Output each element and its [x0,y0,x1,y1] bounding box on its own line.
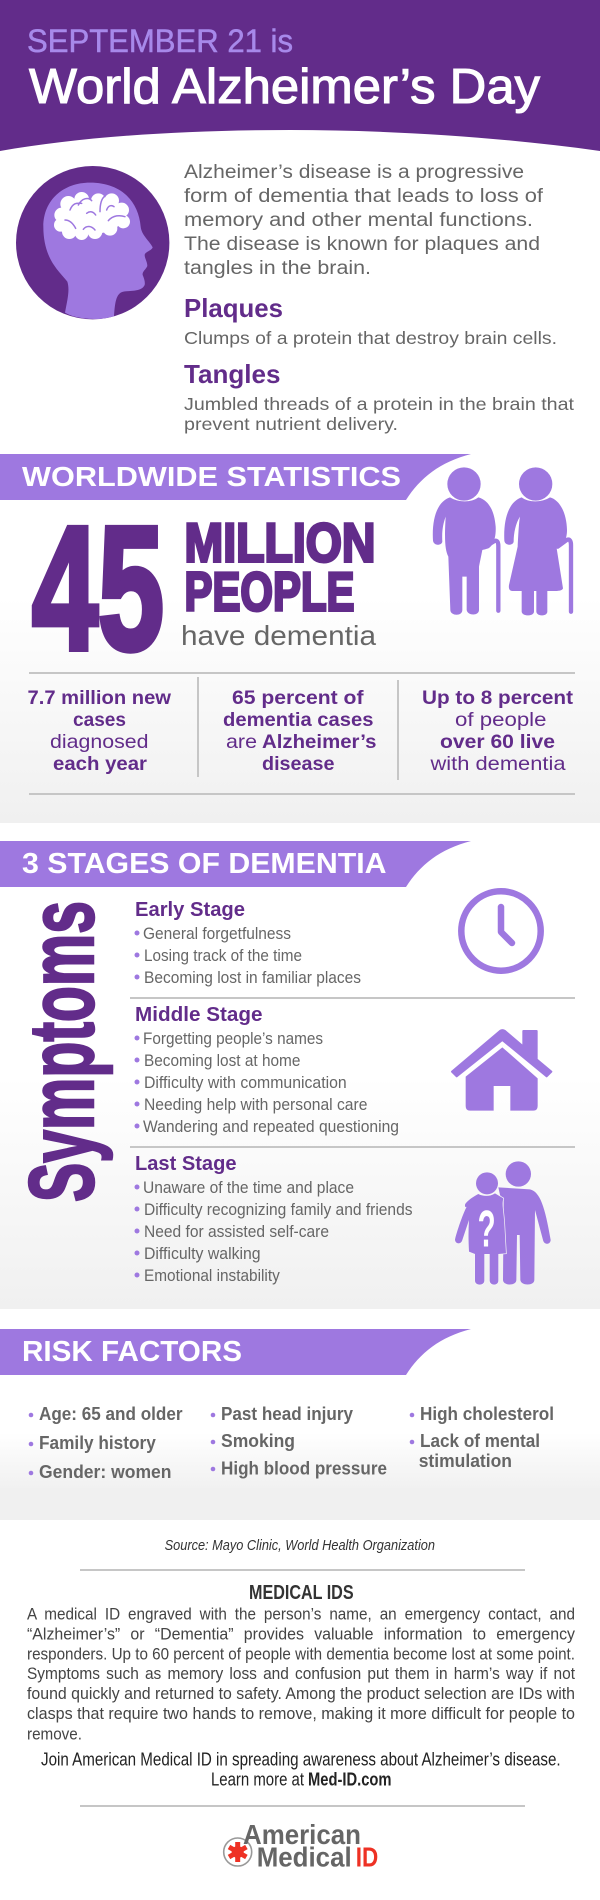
vertical title: symptoms: Symptoms [11,901,113,1202]
plaques definition: Plaques [184,293,283,323]
risk list: column 2: Past head injury [221,1404,353,1424]
risk list: column 1: Gender: women [39,1462,172,1482]
middle stage: Difficulty with communication [144,1073,347,1092]
stat: people over 60 [422,687,574,775]
heading banner: risk factors: RISK FACTORS [22,1336,242,1368]
stat: new cases [28,687,172,775]
stat: share of Alzheimer's: dementia cases [223,709,374,731]
call to action: Learn more at [211,1769,304,1789]
stat: share of Alzheimer's: 65 percent of [232,687,364,709]
middle stage: Wandering and repeated questioning [143,1117,399,1136]
logo: American Medical ID: ID [356,1842,378,1873]
early stage [134,898,361,987]
tangles definition: prevent nutrient delivery. [184,414,398,434]
early stage: General forgetfulness [143,924,291,943]
risk list: column 1: Family history [39,1433,156,1453]
middle stage [134,1003,399,1136]
stat: share of Alzheimer's [223,687,377,775]
last stage: Difficulty recognizing family and friends [144,1200,412,1219]
call to action: Med-ID.com [308,1769,392,1789]
medical IDs block [27,1582,576,1743]
risk list: column 2: High blood pressure [221,1458,387,1478]
title: World Alzheimer’s Day [29,60,541,114]
heading banner: risk factors [0,1329,471,1375]
medical IDs paragraph: “Alzheimer’s” or “Dementia” provides valuable information to emergency [27,1625,576,1643]
heading banner: worldwide statistics [0,454,471,500]
intro paragraph: tangles in the brain. [184,258,371,279]
intro paragraph: memory and other mental functions. [184,210,533,231]
call to action [41,1749,561,1789]
medical IDs paragraph: found quickly and returned to safety. Among the product selection are IDs with [27,1685,575,1703]
header banner [0,0,600,151]
million people [184,512,376,622]
middle stage: Forgetting people’s names [143,1029,323,1048]
plaques definition: Clumps of a protein that destroy brain cells. [184,328,557,348]
stat: people over 60: of people [455,709,546,731]
heading banner: stages: 3 STAGES OF DEMENTIA [22,848,387,880]
icon: clock [461,891,541,971]
stat: new cases: each year [53,753,147,775]
logo: American Medical ID [224,1819,378,1873]
stat: people over 60: with dementia [429,753,566,775]
tangles definition [184,359,574,434]
medical IDs paragraph: remove. [27,1725,82,1743]
plaques definition [184,293,557,348]
medical IDs heading: MEDICAL IDS [249,1582,354,1604]
risk list: column 2 [211,1404,387,1478]
heading banner: worldwide statistics: WORLDWIDE STATISTICS [22,461,401,492]
stat: people over 60: over 60 live [440,731,555,753]
icon: couple with question mark [455,1161,551,1285]
last stage: Emotional instability [144,1266,280,1285]
million people: MILLION [184,512,376,574]
last stage: Need for assisted self-care [144,1222,329,1241]
icon: head with brain [16,166,169,319]
source note: Source: Mayo Clinic, World Health Organization [165,1537,435,1554]
early stage: Early Stage [135,898,245,921]
risk list: column 1 [29,1404,183,1482]
stat: new cases: diagnosed [50,731,148,753]
medical IDs paragraph: clasps that require two hands to remove, making it more difficult for people to [27,1705,575,1723]
date line: SEPTEMBER 21 is [27,23,293,59]
stat: new cases: cases [73,709,126,731]
risk list: column 3: Lack of mental [420,1431,540,1451]
panel: worldwide statistics [0,454,600,823]
panel: risk factors [0,1329,600,1520]
heading banner: stages [0,841,471,887]
middle stage: Middle Stage [135,1003,262,1026]
last stage: Last Stage [135,1152,236,1175]
risk list: column 3: High cholesterol [420,1404,554,1424]
big number 45: 45 [32,491,164,687]
icon: house [452,1030,551,1111]
risk list: column 1: Age: 65 and older [39,1404,182,1424]
risk list: column 3 [410,1404,554,1471]
risk list: column 2: Smoking [221,1431,295,1451]
stat: people over 60: Up to 8 percent [422,687,574,709]
icon: elderly couple with canes [433,467,571,615]
intro paragraph [184,162,544,279]
intro paragraph: Alzheimer’s disease is a progressive [184,162,524,183]
last stage: Difficulty walking [144,1244,261,1263]
intro paragraph: The disease is known for plaques and [184,234,540,255]
logo: American Medical ID: American [243,1819,361,1850]
medical IDs paragraph [27,1605,576,1743]
logo: American Medical ID: Medical [257,1842,352,1873]
stat: share of Alzheimer's: are [226,731,257,753]
risk list: column 3: stimulation [419,1451,512,1471]
stat: new cases: 7.7 million new [28,687,172,709]
middle stage: Becoming lost at home [144,1051,300,1070]
stat: share of Alzheimer's: Alzheimer’s [262,731,377,753]
panel: stages of dementia [0,841,600,1309]
medical IDs paragraph: Symptoms such as memory loss and confusion put them in harm’s way if not [27,1665,575,1683]
stat: share of Alzheimer's: disease [262,753,335,775]
intro paragraph: form of dementia that leads to loss of [184,186,544,207]
early stage: Becoming lost in familiar places [144,968,361,987]
early stage: Losing track of the time [144,946,302,965]
middle stage: Needing help with personal care [144,1095,367,1114]
have dementia: have dementia [181,620,377,651]
tangles definition: Tangles [184,359,280,389]
million people: PEOPLE [184,560,354,622]
last stage [134,1152,412,1285]
last stage: Unaware of the time and place [143,1178,354,1197]
tangles definition: Jumbled threads of a protein in the brain that [184,394,574,414]
icon: couple with question mark: ? [478,1201,496,1259]
